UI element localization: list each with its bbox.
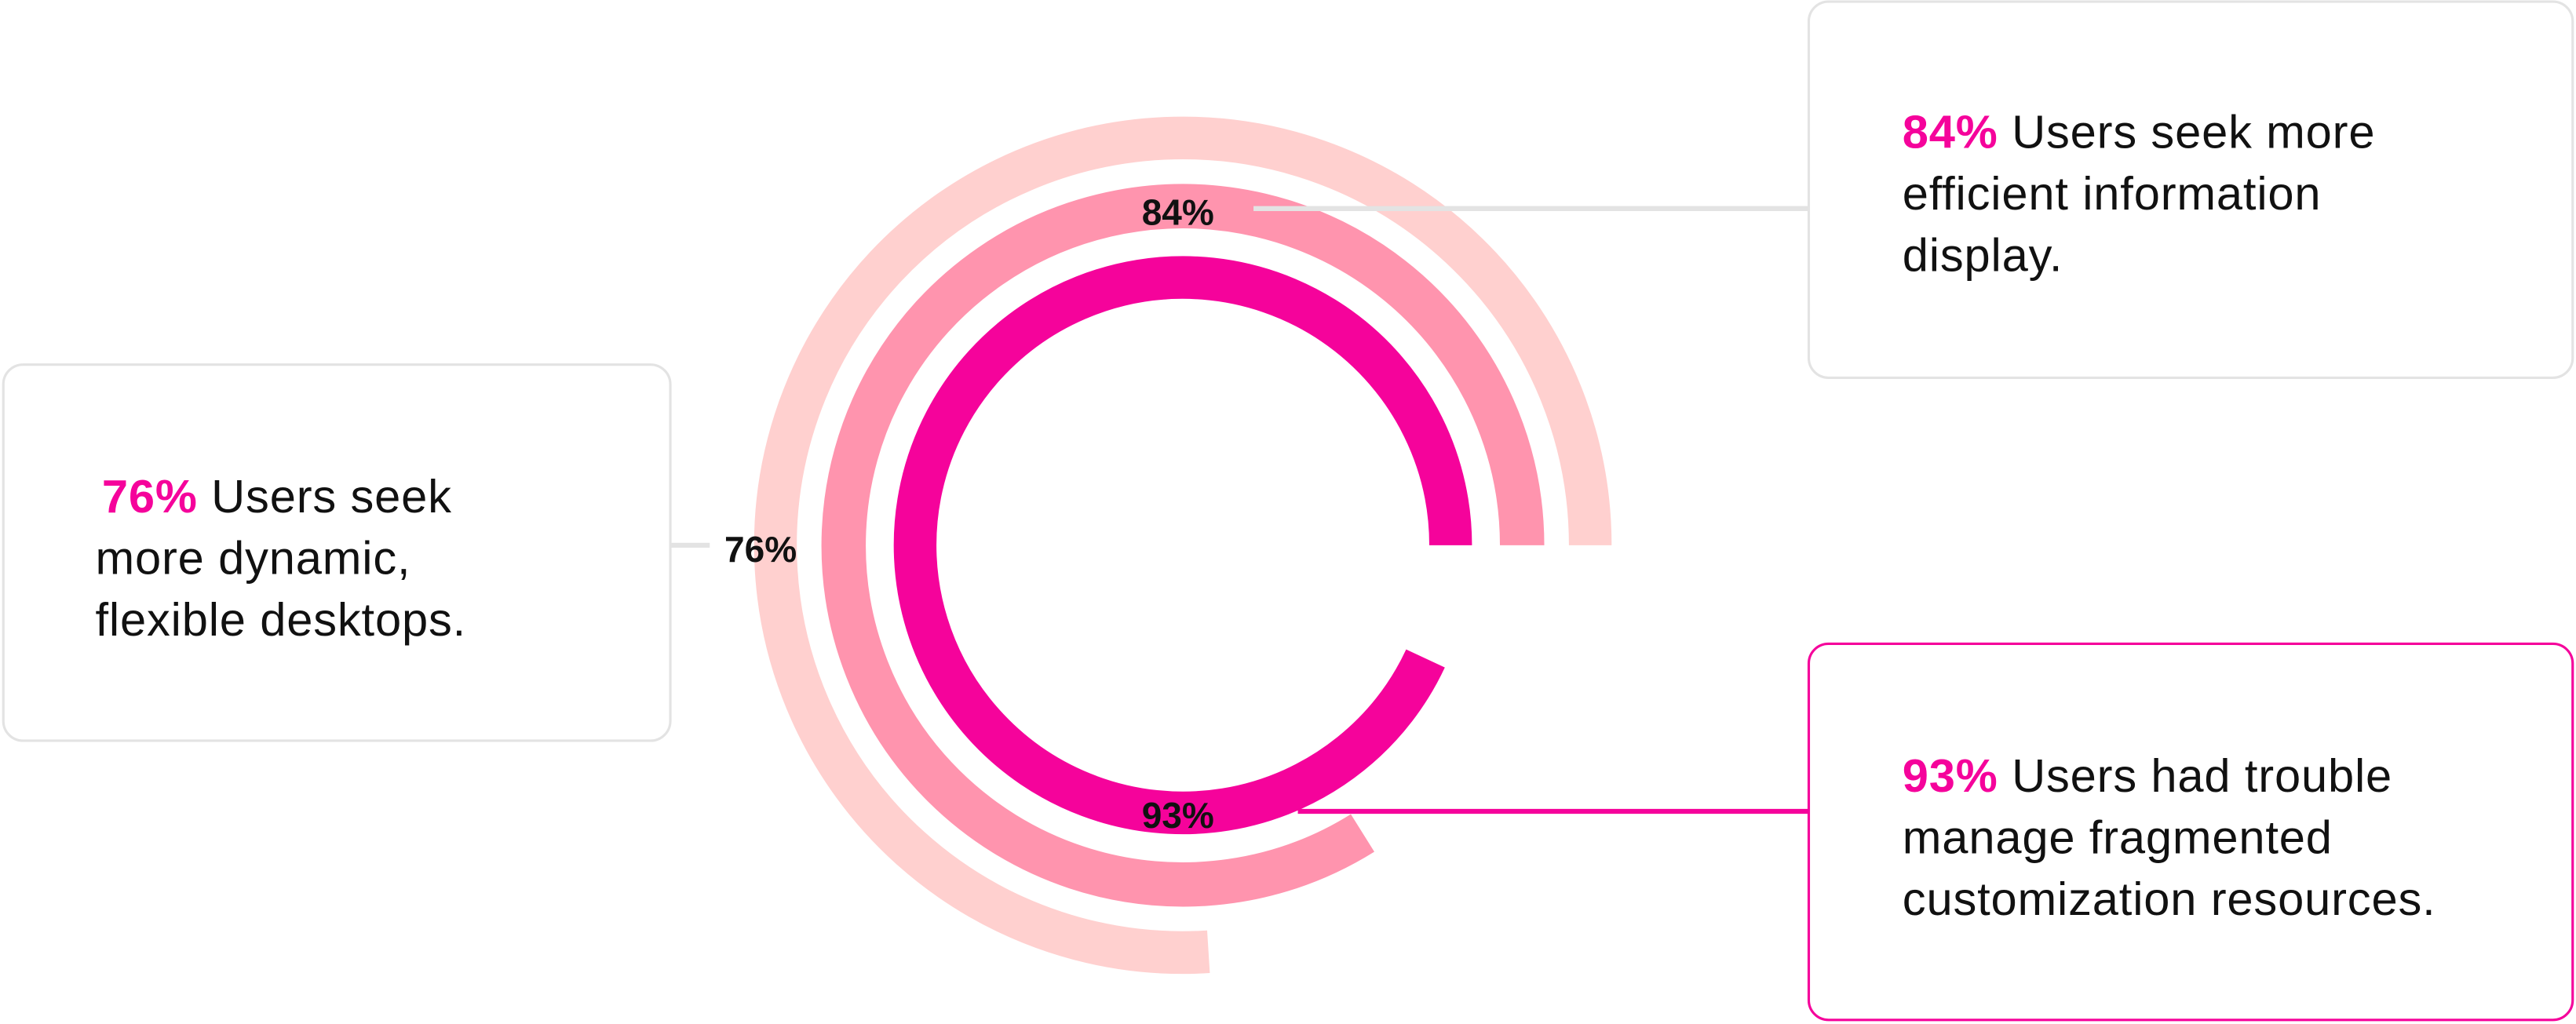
- panel: 84% top right: [1808, 2, 2573, 377]
- text: 93% statement: manage fragmented: [1903, 811, 2333, 863]
- ring: inner 93%: [915, 278, 1450, 813]
- connector: 76%: [670, 544, 710, 546]
- ring label: 84%: 84%: [1142, 192, 1214, 233]
- panel: 93% bottom right: [1808, 643, 2573, 1020]
- ring: middle 84%: [844, 206, 1522, 884]
- panel: 76% left: [3, 365, 670, 741]
- text: 93% statement: customization resources.: [1903, 873, 2436, 925]
- text: 84% statement: efficient information: [1903, 167, 2321, 220]
- text: 76% statement: 76% Users seek: [102, 470, 452, 523]
- ring chart: [775, 138, 1590, 953]
- text: 84% statement: 84% Users seek more: [1903, 105, 2375, 158]
- ring label: 76%: 76%: [724, 529, 797, 570]
- text: 93% statement: 93% Users had trouble: [1903, 749, 2392, 802]
- ring label: 93%: 93%: [1142, 795, 1214, 836]
- connector: 84%: [1253, 207, 1808, 210]
- text: 84% statement: display.: [1903, 228, 2063, 281]
- text: 76% statement: flexible desktops.: [95, 593, 466, 646]
- text: 76% statement: more dynamic,: [95, 532, 410, 585]
- ring: outer 76%: [775, 138, 1590, 953]
- connector: 93%: [1298, 810, 1808, 812]
